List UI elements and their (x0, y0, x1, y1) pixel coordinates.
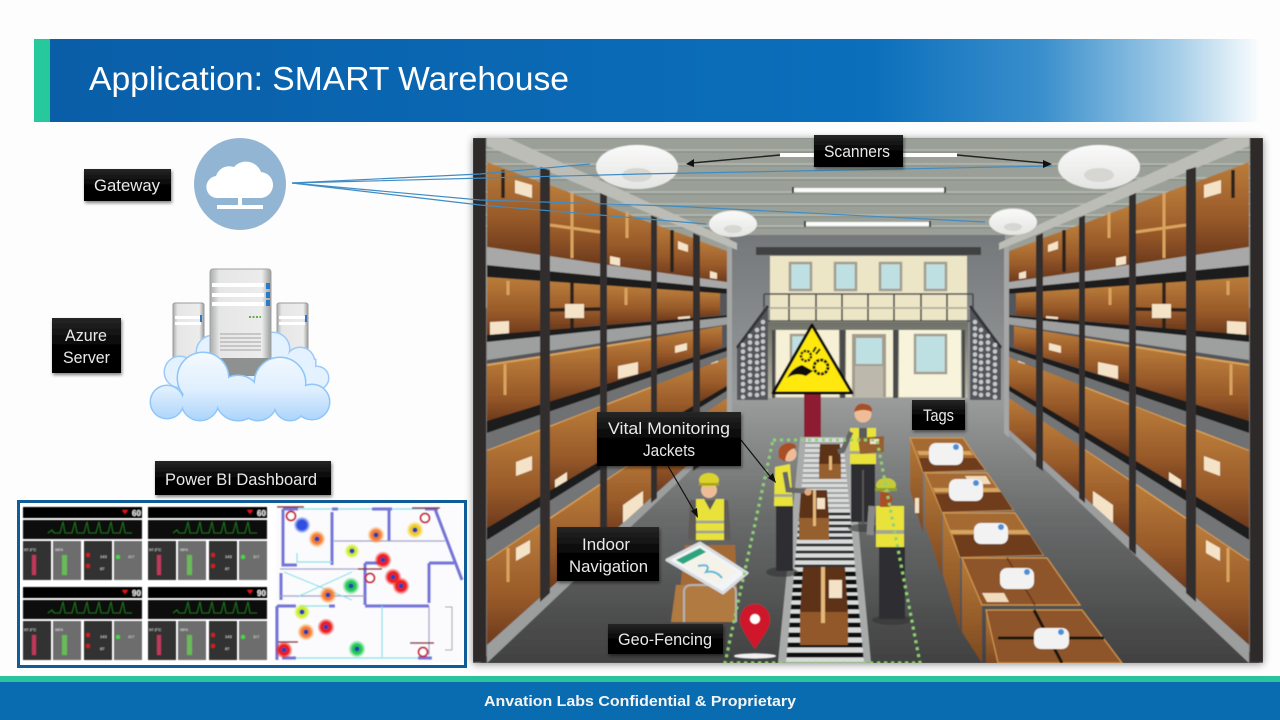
scanner: ceiling top left (596, 145, 678, 189)
vitals panel 1: 117 (128, 554, 135, 559)
scanner: ceiling top right (1058, 145, 1140, 189)
vitals panel 3: 87 (100, 646, 105, 651)
vitals panel 4: 143 (225, 634, 232, 639)
label: Indoor Navigation (557, 527, 659, 581)
title: Application: SMART Warehouse (89, 60, 569, 97)
location pin (734, 604, 776, 658)
vitals panel 3: 143 (100, 634, 107, 639)
floor plan heat markers (276, 507, 440, 658)
box 1 (910, 438, 985, 533)
geo-fence dotted outline (725, 440, 920, 663)
staircases (737, 306, 1001, 400)
floor plan walls (277, 509, 462, 660)
vitals panel 4: 87 (225, 646, 230, 651)
label: Gateway (84, 169, 171, 201)
vitals panel 1: 143 (100, 554, 107, 559)
tag 2 (949, 479, 983, 501)
header banner (34, 39, 1260, 122)
box 4 (962, 558, 1080, 663)
conveyor box front (800, 567, 848, 645)
vitals panel 4: 97.3°C (149, 627, 161, 632)
warning sign on post (773, 325, 852, 438)
ceiling (473, 138, 1263, 308)
vitals panel 2: 98% (180, 547, 188, 552)
worker: right, hard hat (870, 478, 912, 625)
scanner: far left (709, 210, 757, 237)
vitals panel 3: 117 (128, 634, 135, 639)
left shelving rack (473, 137, 737, 663)
vitals panel 1 (23, 507, 142, 580)
vitals panel 3: 97.3°C (24, 627, 36, 632)
floor (480, 400, 1260, 663)
mezzanine building (756, 247, 981, 398)
ceiling lights (793, 187, 945, 227)
icon: gateway cloud (194, 138, 286, 230)
vitals panel 3 (23, 587, 142, 660)
label: Vital Monitoring Jackets (597, 412, 741, 466)
conveyor box rear (819, 444, 841, 479)
warehouse scene (473, 137, 1263, 663)
scanner: far right (989, 208, 1037, 235)
label: Azure Server: Azure (65, 326, 107, 345)
panel: Power BI dashboard (18, 502, 466, 666)
label: Geo-Fencing: Geo-Fencing (618, 630, 712, 649)
box 5 (986, 610, 1122, 663)
conveyor belt (778, 437, 871, 663)
vitals panel 1: 87 (100, 566, 105, 571)
tag 1 (929, 443, 963, 465)
tag 4 (1000, 568, 1034, 589)
worker: centre, facing belt (766, 443, 812, 577)
box 3 (943, 513, 1043, 630)
vitals panel 2: 87 (225, 566, 230, 571)
label: Scanners: Scanners (824, 142, 890, 161)
vitals panel 3: 98% (55, 627, 63, 632)
vitals panel 2: 117 (253, 554, 260, 559)
label: Vital Monitoring Jackets: Vital Monitoring (608, 419, 730, 438)
icon: Azure server in cloud (151, 269, 329, 420)
label: Scanners (814, 135, 903, 167)
label: Power BI Dashboard (155, 461, 331, 495)
back wall (730, 235, 1005, 435)
vitals panel 1: 60 (132, 509, 141, 518)
label: Geo-Fencing (608, 624, 723, 654)
label: Power BI Dashboard: Power BI Dashboard (165, 470, 317, 489)
tag 3 (974, 523, 1008, 544)
label: Indoor Navigation: Indoor (582, 535, 630, 554)
vitals panel 4 (148, 587, 267, 660)
label: Gateway: Gateway (94, 176, 160, 195)
vitals panel 4: 90 (257, 589, 266, 598)
link lines from gateway to scanners (292, 164, 1052, 224)
vitals panel 2: 143 (225, 554, 232, 559)
vitals panel 1: 97.3°C (24, 547, 36, 552)
vitals panel 2 (148, 507, 267, 580)
label: Azure Server: Server (63, 348, 110, 367)
vitals panel 3: 90 (132, 589, 141, 598)
worker: top, holding box (838, 404, 884, 532)
vitals panel 4: 117 (253, 634, 260, 639)
smartphone map (667, 543, 747, 593)
label: Vital Monitoring Jackets: Jackets (643, 441, 695, 460)
label: Indoor Navigation: Navigation (569, 557, 648, 576)
footer band (0, 676, 1280, 720)
box 2 (925, 473, 1013, 577)
vitals panel 2: 60 (257, 509, 266, 518)
worker: front with trolley (671, 473, 737, 622)
tagged boxes row (910, 438, 1122, 663)
tag 5 (1034, 628, 1069, 649)
vitals panel 2: 97.3°C (149, 547, 161, 552)
vital jackets pointers (668, 440, 776, 518)
conveyor box middle (799, 490, 829, 540)
label: Tags (912, 400, 965, 430)
vitals panel 4: 98% (180, 627, 188, 632)
label: Tags: Tags (923, 406, 954, 425)
footer text: Anvation Labs Confidential & Proprietary (484, 693, 797, 710)
floor plan heat map (276, 506, 463, 662)
right shelving rack (999, 137, 1263, 663)
label: Azure Server (52, 318, 121, 373)
scanner pointers (686, 155, 1052, 168)
vitals panel 1: 98% (55, 547, 63, 552)
